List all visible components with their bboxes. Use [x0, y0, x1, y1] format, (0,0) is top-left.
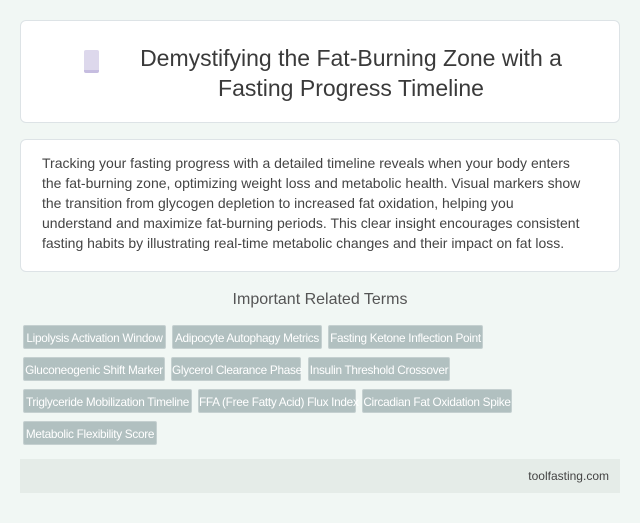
- icon: document: [84, 50, 99, 73]
- tags: Triglyceride Mobilization Timeline: [26, 395, 189, 409]
- tags: Adipocyte Autophagy Metrics: [175, 331, 319, 345]
- tags: Insulin Threshold Crossover: [310, 363, 448, 377]
- footer text: toolfasting.com: [528, 469, 609, 483]
- tags: Gluconeogenic Shift Marker: [25, 363, 163, 377]
- title card: [20, 20, 620, 123]
- title: Demystifying the Fat-Burning Zone with a Fasting Progress Timeline: [140, 45, 562, 101]
- tags: Glycerol Clearance Phase: [172, 363, 302, 377]
- description text: Tracking your fasting progress with a detailed timeline reveals when your body enters the fat-burning zone, optimizing weight loss and metabolic health. Visual markers show the transition from glycogen depletion to increased fat oxidation, helping you understand and maximize fat-burning periods. This clear insight encourages consistent fasting habits by illustrating real-time metabolic changes and their impact on fat loss.: [42, 155, 580, 251]
- tags: Lipolysis Activation Window: [26, 331, 163, 345]
- description card: [20, 139, 620, 272]
- tags: Circadian Fat Oxidation Spike: [363, 395, 511, 409]
- footer: [20, 459, 620, 493]
- tags: Fasting Ketone Inflection Point: [330, 331, 481, 345]
- tags: FFA (Free Fatty Acid) Flux Index: [199, 395, 359, 409]
- tags: Metabolic Flexibility Score: [26, 427, 154, 441]
- section heading: Important Related Terms: [233, 291, 407, 308]
